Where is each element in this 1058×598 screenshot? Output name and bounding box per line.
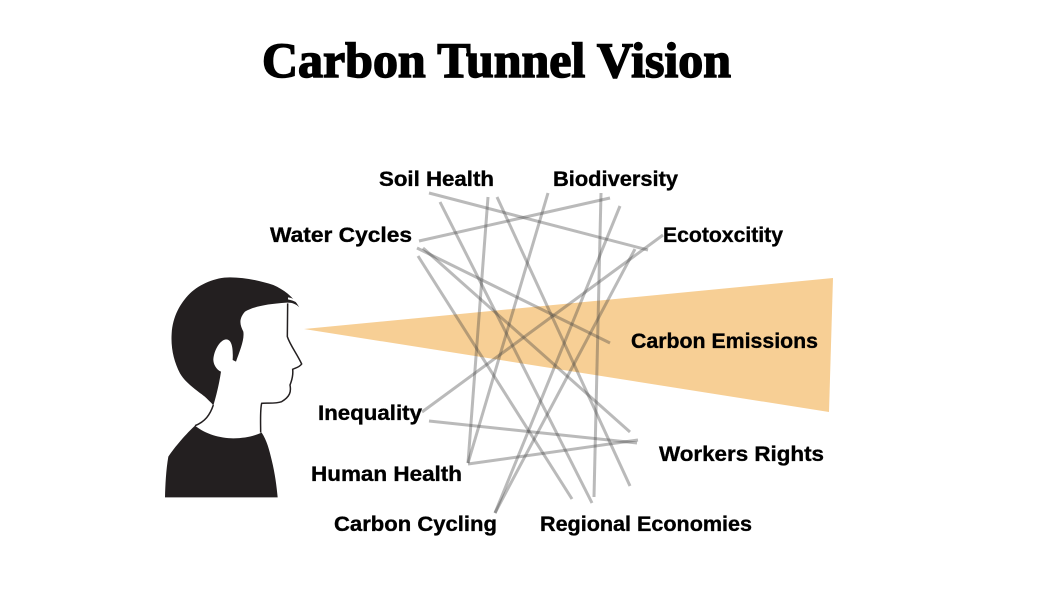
label: Human Health: Human Health	[311, 463, 462, 486]
label: Soil Health: Soil Health	[379, 168, 494, 191]
label: Water Cycles: Water Cycles	[270, 224, 412, 247]
label: Carbon Emissions: Carbon Emissions	[631, 330, 818, 353]
label: Inequality: Inequality	[318, 402, 422, 425]
label: Carbon Cycling: Carbon Cycling	[334, 513, 497, 536]
label: Ecotoxcitity: Ecotoxcitity	[663, 224, 783, 247]
face outline	[261, 303, 302, 433]
shirt	[165, 426, 278, 497]
tangled lines connecting impact categories	[417, 193, 663, 513]
tunnel vision beam	[304, 278, 833, 412]
label: Workers Rights: Workers Rights	[659, 443, 824, 466]
icon: person in profile	[165, 277, 302, 497]
hair highlight	[288, 297, 297, 303]
title: Carbon Tunnel Vision	[262, 32, 731, 88]
hair	[171, 277, 299, 406]
label: Biodiversity: Biodiversity	[553, 168, 678, 191]
label: Regional Economies: Regional Economies	[540, 513, 752, 536]
neck outline	[195, 405, 213, 426]
